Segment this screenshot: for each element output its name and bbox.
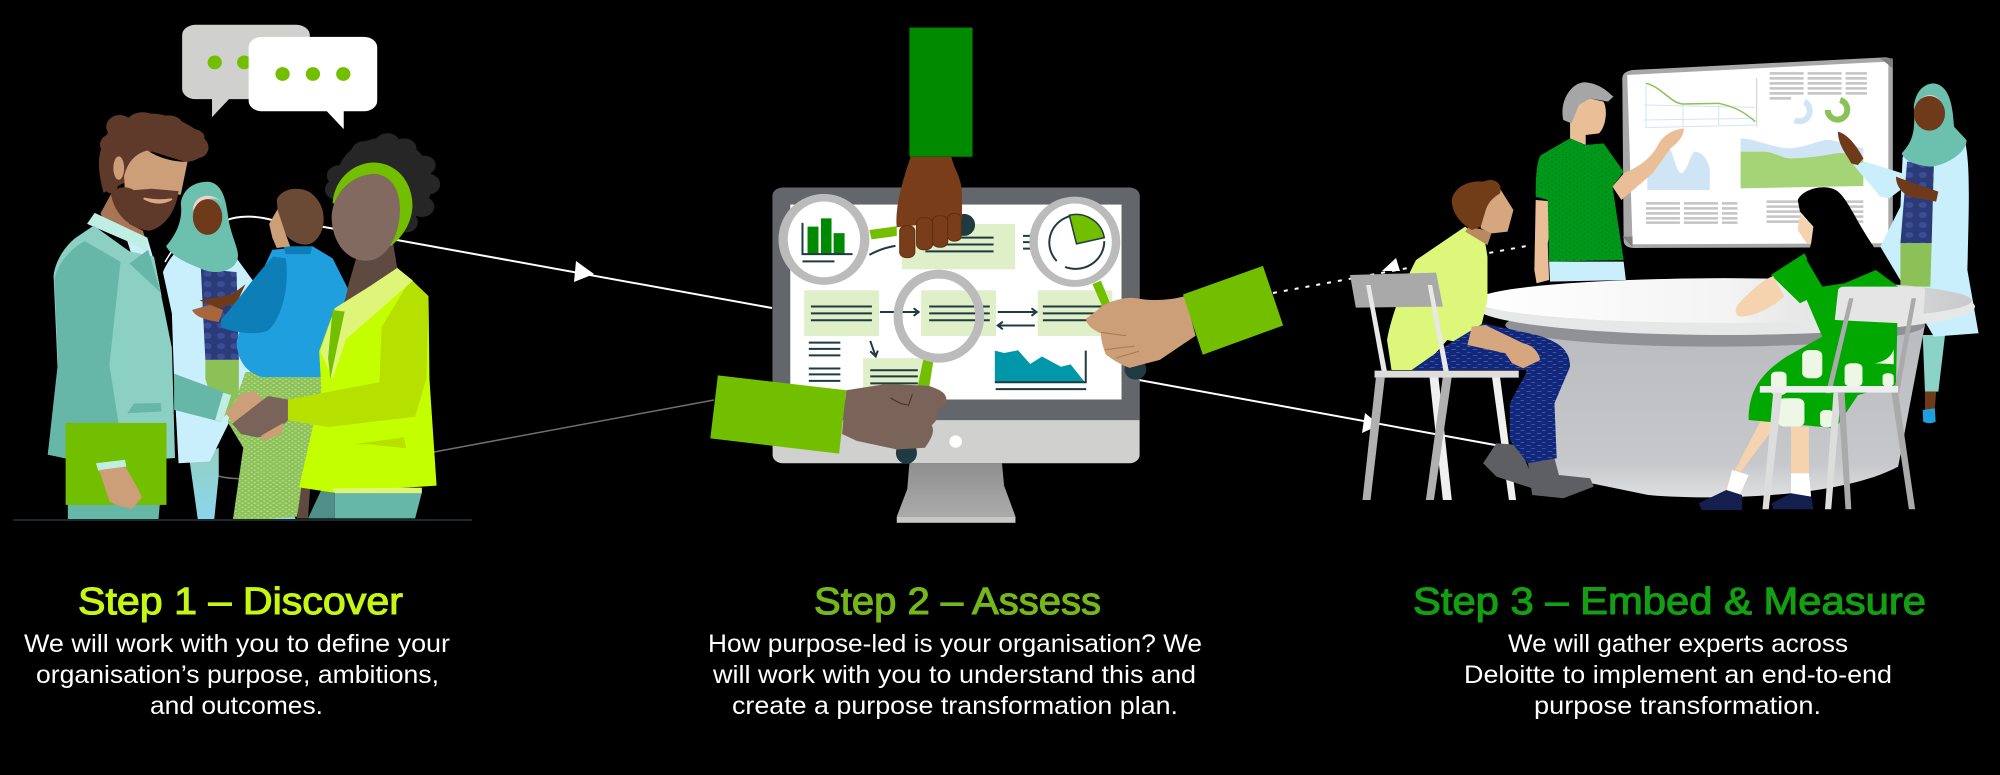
person: woman with lime jacket [288,133,440,518]
screen text lines and arrows [809,236,1104,383]
connector: white line from step 1 to step 2 [165,217,772,308]
hand: right hand with green sleeve [1086,266,1283,380]
heading: step 1: Step 1 – Discover [78,581,403,623]
monitor body [773,188,1140,463]
body: step 1: organisation’s purpose, ambitions, [36,661,439,689]
icon: handshake [225,391,288,441]
magnifier: bar chart lens [783,198,897,281]
body: step 1 [24,630,450,720]
magnifier: pie chart lens [1034,200,1116,308]
chair: right chair [1760,287,1925,509]
arrowhead on white connector [574,261,594,282]
body: step 3: We will gather experts across [1508,630,1848,658]
hand: top hand with green sleeve [896,28,975,258]
body: step 1: We will work with you to define your [24,630,450,658]
connector: dotted line from step 2 to step 3 [1273,245,1532,293]
illustration: step 3 team around table [1350,57,1979,510]
connector: grey line from step 2 back to step 1 [218,400,714,479]
connector: white line from step 2 to step 3 [1139,380,1528,451]
screen flowchart boxes [804,224,1112,393]
body: step 2: create a purpose transformation plan. [732,692,1178,720]
chair: left chair legs [1362,377,1516,500]
whiteboard [1622,57,1893,248]
body: step 1: and outcomes. [150,692,323,720]
ground line [13,519,472,521]
body: step 3 [1464,630,1892,720]
table [1475,278,1975,497]
body: step 3: Deloitte to implement an end-to-end [1464,661,1892,689]
person: woman in hijab and white coat [163,182,296,519]
magnifier: centre lens [898,274,980,387]
body: step 3: purpose transformation. [1534,692,1821,720]
illustration: step 1 people meeting [13,25,472,520]
arrowhead on dotted connector [1382,258,1400,271]
text block: step 3 [1413,581,1926,720]
monitor stand [897,463,1015,523]
text block: step 2 [708,581,1202,720]
person: seated woman in green dress [1699,187,1898,510]
body: step 2: will work with you to understand this and [712,661,1196,689]
person: man with beard and teal jacket [48,112,231,519]
person: seated man [1387,180,1594,498]
hand: left hand with green sleeve [710,375,946,464]
chart: donuts [1795,100,1847,121]
heading: step 2: Step 2 – Assess [814,581,1101,623]
chart: blue and green area charts [1647,138,1863,190]
chair: left chair back and seat [1350,273,1519,378]
arrowhead on lower connector [1362,413,1380,433]
icon: white speech bubble [249,37,377,129]
text lines on whiteboard [1646,73,1867,223]
heading: step 3: Step 3 – Embed & Measure [1413,581,1926,623]
chart: line chart [1644,78,1757,128]
icon: grey speech bubble [182,25,310,117]
text block: step 1 [24,581,450,720]
body: step 2 [708,630,1202,720]
person: woman presenting in hijab [1838,83,1979,423]
person: standing man in green shirt [1534,82,1684,283]
illustration: step 2 monitor and magnifying hands [710,28,1283,523]
chart: teal area chart [995,350,1086,389]
person: boy in blue jumper [221,189,348,519]
body: step 2: How purpose-led is your organisation? We [708,630,1202,658]
